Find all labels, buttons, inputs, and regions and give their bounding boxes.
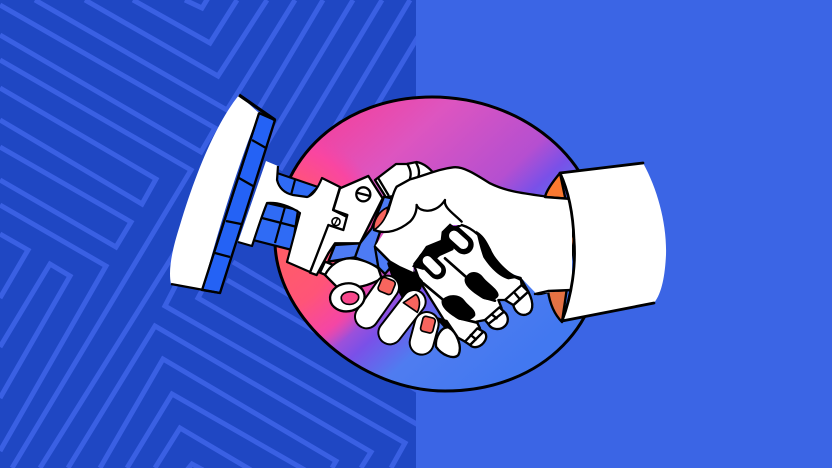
plate blue rim — [202, 113, 275, 293]
pill upper — [454, 236, 464, 245]
background: left maze panel — [0, 0, 425, 468]
robot hand and human hand — [310, 162, 552, 357]
nail four — [420, 316, 436, 334]
ring and cap: finger B — [485, 307, 508, 329]
lower blue window — [253, 203, 298, 250]
black blotch lower — [437, 318, 457, 337]
third finger — [390, 302, 414, 333]
cuff white sleeve — [560, 163, 666, 321]
black patch under palm — [388, 263, 422, 298]
wrist fill — [535, 197, 572, 294]
screw small — [332, 218, 340, 226]
second finger — [367, 287, 387, 317]
black thumb-side blotch — [476, 231, 520, 279]
gradient ellipse — [275, 97, 601, 391]
robot palm — [325, 258, 382, 288]
upper knuckle — [375, 162, 435, 197]
human hand — [374, 167, 552, 294]
upper blue window — [277, 173, 318, 198]
small finger — [436, 327, 460, 357]
arm white body — [238, 161, 347, 272]
blue connector — [328, 197, 393, 274]
finger separators — [423, 258, 495, 323]
wrist plate — [310, 176, 383, 275]
cuff orange lining — [545, 173, 574, 322]
key connector — [412, 223, 458, 270]
small link — [320, 262, 333, 276]
segmented robot fingers — [388, 225, 528, 342]
pink nail — [341, 292, 359, 304]
thumb nail — [374, 207, 387, 230]
plate white face — [170, 95, 259, 290]
nail three — [403, 294, 419, 312]
black blotch upper — [465, 272, 499, 300]
finger silhouette — [413, 225, 528, 342]
shirt cuff — [535, 163, 666, 322]
ring and cap: finger C — [465, 328, 486, 347]
nail two — [377, 276, 396, 296]
ring and cap: finger A — [505, 275, 532, 315]
thumb with pink nail — [328, 281, 366, 314]
robot arm — [238, 161, 347, 272]
robot base plate — [170, 95, 275, 293]
black blotch middle — [441, 295, 475, 320]
fourth finger — [422, 324, 427, 343]
pill lower — [427, 260, 437, 271]
finger top details — [412, 223, 532, 347]
screw large — [356, 187, 370, 201]
